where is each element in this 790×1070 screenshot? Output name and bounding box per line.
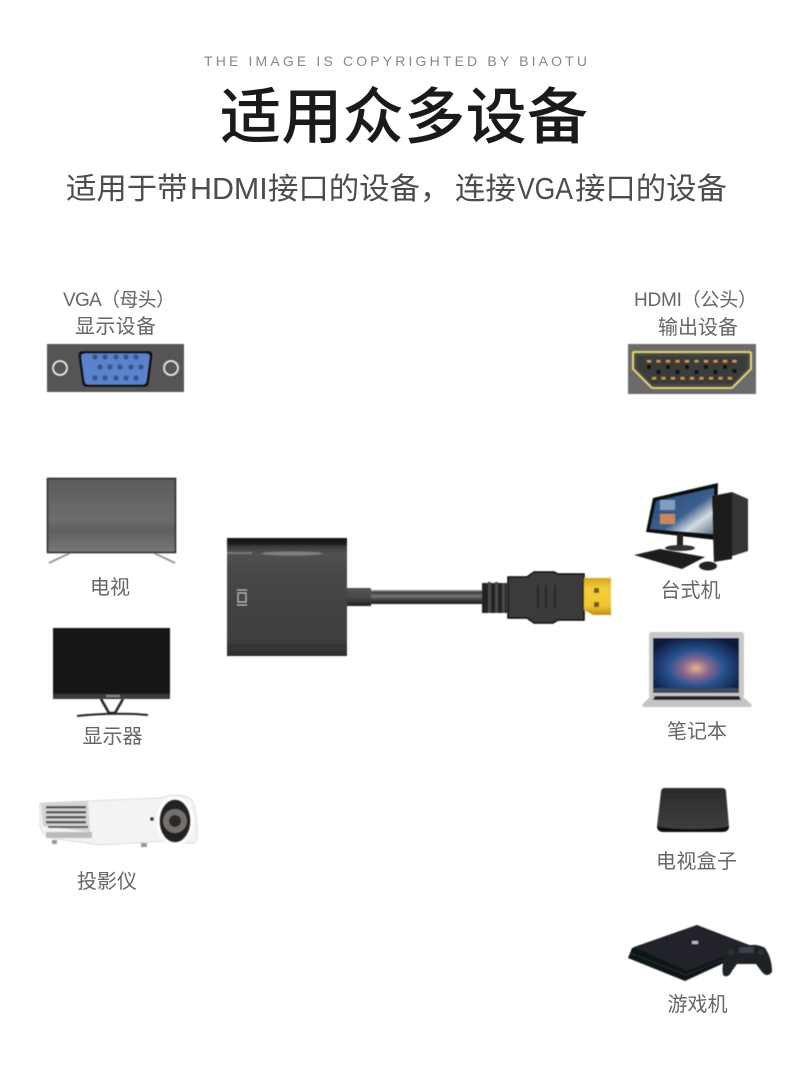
icon: VGA mark: [237, 590, 247, 605]
icon: HDMI connector: [628, 344, 756, 394]
label: game console: 游戏机: [668, 993, 728, 1016]
panel: game console: [628, 925, 772, 1016]
icon: monitor: [53, 628, 170, 716]
label: laptop: 笔记本: [667, 720, 727, 743]
label: VGA female: VGA（母头）: [63, 289, 175, 311]
subtitle: VGA: [517, 172, 574, 206]
panel: TV: [48, 478, 176, 599]
panel: monitor: [53, 628, 170, 748]
panel: laptop: [642, 632, 752, 743]
subtitle: 连接: [455, 172, 516, 206]
cable boot: [482, 582, 507, 613]
strain relief: [347, 588, 371, 606]
subtitle: [66, 172, 727, 206]
panel: VGA port: [47, 289, 184, 392]
label: monitor: 显示器: [82, 726, 142, 748]
icon: laptop: [642, 632, 752, 707]
subtitle: HDMI: [190, 172, 268, 206]
label: HDMI male: HDMI（公头）: [634, 289, 757, 311]
icon: projector: [40, 795, 197, 847]
HDMI plug body: [508, 572, 584, 623]
label: TV box: 电视盒子: [656, 850, 737, 873]
adapter: HDMI to VGA: [227, 538, 611, 656]
icon: game console: [628, 925, 772, 981]
subtitle: 适用于带: [66, 172, 188, 206]
label: projector: 投影仪: [77, 870, 137, 893]
title: 适用众多设备: [220, 83, 588, 151]
icon: TV: [48, 478, 176, 563]
subtitle: 接口的设备: [575, 172, 727, 206]
subtitle: 接口的设备，: [268, 172, 450, 206]
cable: [371, 590, 482, 604]
icon: TV box: [657, 788, 729, 832]
panel: desktop: [634, 483, 748, 602]
panel: projector: [40, 795, 197, 893]
panel: HDMI port: [628, 289, 757, 394]
label: desktop: 台式机: [660, 579, 720, 602]
copyright caption: THE IMAGE IS COPYRIGHTED BY BIAOTU: [204, 53, 587, 69]
label: output device: 输出设备: [658, 316, 738, 339]
icon: desktop computer: [634, 483, 748, 570]
label: TV: 电视: [90, 576, 130, 599]
label: display device: 显示设备: [75, 315, 156, 338]
panel: TV box: [656, 788, 737, 873]
HDMI gold tip: [584, 578, 611, 615]
adapter body: [227, 538, 347, 656]
icon: VGA connector: [47, 344, 184, 392]
